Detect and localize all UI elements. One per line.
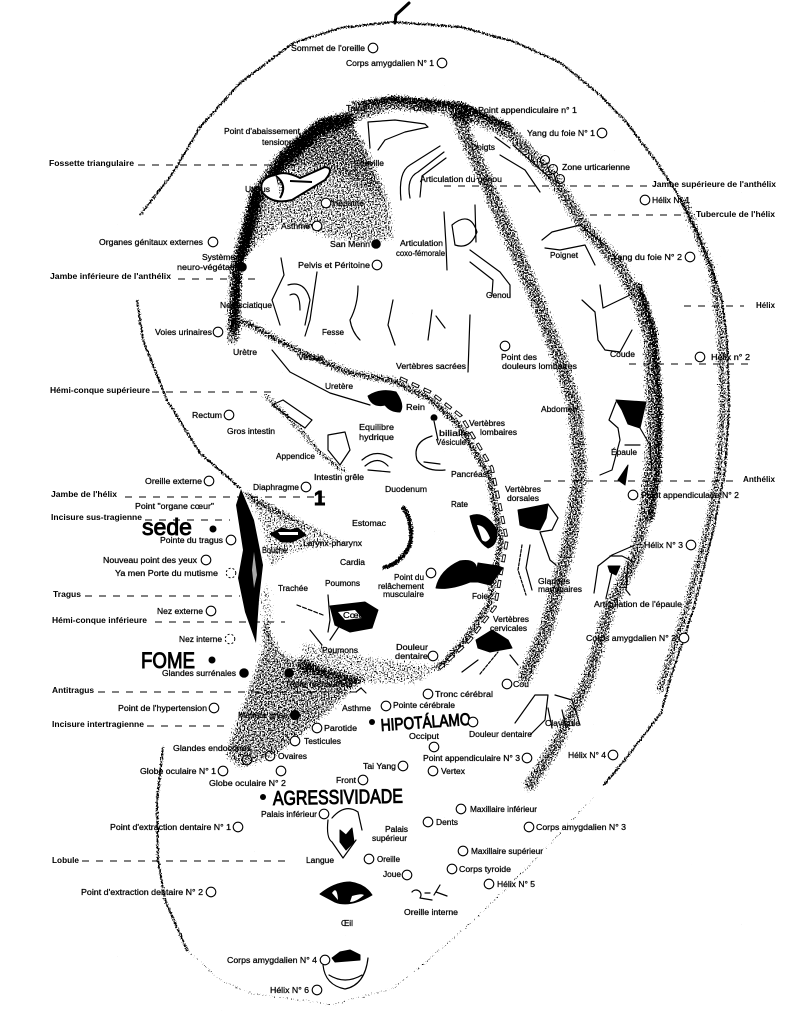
point: Oreille externe: Oreille externe [145,477,203,486]
point: Nez externe [157,606,216,616]
label: Gros intestin: Gros intestin [227,427,275,436]
label: biliaire Vésicule: biliaire [439,429,471,438]
label: Vertèbres dorsales [505,485,541,503]
point: douleurs lombaires: douleurs lombaires [502,362,577,371]
label: Genou: Genou [486,291,511,300]
label: Orteils: Orteils [413,104,437,113]
point: Cou [502,679,529,689]
label: biliaire Vésicule: Vésicule [436,438,467,447]
point: Zone urticarienne: Zone urticarienne [562,163,631,172]
label: Vertèbres cervicales: Vertèbres [493,615,529,624]
icon: wrist and hand [542,225,605,265]
label: Incisure intertragienne: Incisure intertragienne [52,720,145,729]
point: Diaphragme [253,482,311,492]
label: Tragus: Tragus [53,590,82,599]
point: Asthme and Pointe cérébrale [342,701,456,713]
point: Corps amygdalien 3: Corps amygdalien N° 3 [536,823,627,832]
label: Cardia: Cardia [340,558,366,567]
point: Glandes surrénales: Glandes surrénales [162,669,236,678]
point: Douleur dentaire lower [468,717,533,739]
label: Equilibre hydrique: hydrique [359,433,395,442]
point: Ovaires [242,751,307,765]
panel: ear drawing [137,22,729,1005]
point: Hélix 3: Hélix N° 3 [644,541,684,550]
point: Sommet de l'oreille: Sommet de l'oreille [291,44,366,53]
point: Yang du foie 1: Yang du foie N° 1 [527,129,596,138]
point: Globe oculaire 1: Globe oculaire N° 1 [140,767,217,776]
point: Voies urinaires: Voies urinaires [155,328,212,337]
point: Hélix 4 [568,750,618,760]
icon: woman head with shoulder [616,400,646,428]
point: Ya men [115,568,236,578]
point: Joue [383,870,412,880]
point: Yang du foie 2: Yang du foie N° 2 [612,253,683,262]
point: relâchement musculaire: musculaire [383,590,425,599]
point: Zone urticarienne [540,156,631,184]
point: Parotide [312,723,358,733]
label: Foie: Foie [472,592,489,601]
point: Palais inférieur: Palais inférieur [261,810,317,819]
vertebrae dashed strip [400,378,507,668]
label: Vertèbres lombaires [469,419,517,437]
point: Pelvis et Péritoine: Pelvis et Péritoine [298,261,371,270]
icon: foot [368,120,428,150]
label: Doigts: Doigts [471,143,495,152]
point: Front [336,775,368,785]
point: Point appendiculaire 2: Point appendiculaire N° 2 [641,491,740,500]
outer ear contour [137,22,729,1005]
label: Estomac: Estomac [352,519,386,528]
handwritten number 1: 1 [314,488,325,510]
icon: knee [400,146,446,200]
point: Hélix 4: Hélix N° 4 [568,751,607,760]
point: Corps amygdalien 1: Corps amygdalien N° 1 [346,59,435,68]
label: Vertèbres cervicales [490,615,529,633]
point: Hélix 5: Hélix N° 5 [497,880,536,889]
point: Occiput: Occiput [409,732,440,741]
point: Testicules: Testicules [304,737,341,746]
label: Poumons lower: Poumons [322,646,358,655]
point: Oreille [364,854,401,864]
label: Larynx-pharynx: Larynx-pharynx [303,539,362,548]
icon: spleen [470,515,497,548]
point: douleurs lombaires [500,341,577,371]
icon: shoulder joint [594,545,635,598]
point: Yang du foie 2 [612,252,695,262]
point: Occiput [409,732,440,752]
label: Talon: Talon [346,104,367,113]
label: Glandes mammaires [538,577,582,594]
label: Poumons upper: Poumons [325,579,360,588]
point: extraction dentaire 1: Point d'extraction dentaire N° 1 [110,823,232,832]
label: Articulation du genou: Articulation du genou [420,175,502,184]
point: Système neuro-végétatif [177,253,246,272]
point: Triple réchauffeur: Triple réchauffeur [285,680,353,689]
label: Palais supérieur [372,825,408,843]
label: Palais supérieur: supérieur [372,834,407,843]
point: abaissement tensionnel: tensionnel [262,138,300,147]
point: Ya men: Ya men Porte du mutisme [115,569,219,578]
point: Hélix 5 [484,879,536,889]
label: Vessie: Vessie [298,353,325,362]
point: Maxillaire inférieur: Maxillaire inférieur [470,805,537,814]
icon: buttock [350,286,395,345]
point: Hélix 1: Hélix N° 1 [652,196,691,205]
point: relâchement musculaire [378,568,436,599]
icon: lower mouth [332,950,360,962]
point: abaissement tensionnel [224,127,313,147]
point: Nez interne: Nez interne [179,635,223,644]
handwritten agressividade: AGRESSIVIDADE [273,786,403,810]
point: Hélix 3 [644,540,696,550]
icon: inner ear [412,885,447,900]
point: Joue: Joue [383,870,402,879]
label: biliaire Vésicule [436,429,471,447]
point: Matière grise [238,710,300,720]
point: Douleur dentaire upper: Douleur [396,643,428,652]
icon: neck cervical [476,630,512,652]
label: Articulation coxo-fémorale [396,239,446,258]
anatomical illustrations [261,120,652,989]
label: Anthélix: Anthélix [743,475,776,484]
point: Cou: Cou [513,680,529,689]
point: Point appendiculaire 1: Point appendiculaire n° 1 [478,106,578,115]
label: Glandes mammaires: Glandes [538,577,570,586]
point: Pointe du tragus: Pointe du tragus [160,536,223,545]
point: Douleur dentaire upper [395,643,438,661]
point: Douleur dentaire lower: Douleur dentaire [469,730,533,739]
icon: biliary vesicle and pancreas [416,421,445,470]
label: Vertèbres dorsales: dorsales [507,494,539,503]
point: Rectum [192,410,234,420]
tragus black shape [236,489,263,643]
label: Incisure sus-tragienne: Incisure sus-tragienne [51,513,143,522]
point: relâchement musculaire: relâchement [378,582,425,591]
point: Asthme: Asthme [281,222,311,231]
icon: adrenal small mark [356,688,366,693]
point: Organes génitaux externes: Organes génitaux externes [99,238,203,247]
point: Diaphragme: Diaphragme [253,483,300,492]
label: Urètre: Urètre [233,348,258,357]
point: Hélix 6: Hélix N° 6 [270,986,310,995]
region labels [49,159,777,865]
point: Hélix 2 [695,352,751,362]
point: San Menn: San Menn [330,240,370,249]
label: Intestin grêle: Intestin grêle [314,473,365,482]
handwritten hipotalamo [369,710,471,735]
point: Tronc cérébral [423,689,493,699]
label: Oeil: Œil [341,919,353,928]
point: Globe oculaire 2: Globe oculaire N° 2 [209,779,287,788]
point: Asthme and Pointe cérébrale: Asthme [342,704,372,713]
label: Fesse: Fesse [322,328,345,337]
point: Dents [423,817,458,827]
point: Triple réchauffeur [284,668,353,689]
label: Jambe inférieure: Jambe inférieure de l'anthélix [50,272,172,281]
label: Pancréas: Pancréas [451,470,487,479]
label: Épaule: Épaule [611,448,638,457]
handwritten sede [142,514,216,540]
icon: liver [436,561,503,588]
point: Hépatite [321,198,365,208]
point: Parotide: Parotide [324,724,358,733]
point: Rectum: Rectum [192,411,222,420]
point: Front: Front [336,776,357,785]
point: San Menn [330,240,380,249]
label: Equilibre hydrique: Equilibre [359,423,395,432]
handwritten sede: sede [142,514,192,540]
label: Tubercule de l'hélix: Tubercule de l'hélix [696,210,776,219]
label: Clavicule: Clavicule [545,719,581,728]
point: Vertex: Vertex [441,767,465,776]
icon: elbow [582,285,632,352]
label: Abdomen: Abdomen [541,405,577,414]
label: Bouche: Bouche [262,546,288,555]
label: Coeur: Cœur [343,611,367,620]
point: Dents: Dents [436,818,458,827]
label: Oreille interne: Oreille interne [404,908,459,917]
label: Coude: Coude [610,350,636,359]
point: extraction dentaire 2: Point d'extraction dentaire N° 2 [81,888,204,897]
label: Glandes endocrines: Glandes endocrines [173,744,251,753]
icon: mouth [270,528,306,542]
label: Hémi-conque inférieure: Hémi-conque inférieure [52,616,148,625]
point: Hélix 1 [640,195,691,205]
handwritten top stroke [395,3,409,23]
point: Hépatite: Hépatite [332,199,365,208]
icon: ureter [272,350,370,405]
label: Trachée: Trachée [278,584,309,593]
icon: clavicle [515,695,580,735]
point: Corps amygdalien 4: Corps amygdalien N° 4 [227,956,318,965]
point: Nez externe: Nez externe [157,607,204,616]
icon: spine [518,545,526,595]
icon: kidney [368,391,402,412]
icon: pelvis and sciatic nerve [272,258,317,336]
icon: sacral vertebrae [428,310,470,372]
label: Antitragus: Antitragus [52,686,95,695]
shaded bands of helix and antihelix [225,98,723,785]
point: Matière grise: Matière grise [238,711,289,720]
label: Vertèbres sacrées: Vertèbres sacrées [396,362,466,371]
icon: eye [320,882,372,904]
point: Tai Yang: Tai Yang [363,762,396,771]
label: Glandes mammaires: mammaires [538,585,582,594]
point: Point de l'hypertension: Point de l'hypertension [118,704,207,713]
icon: fingers [495,137,550,192]
point: Nez interne [179,634,235,644]
label: Vertèbres lombaires: lombaires [480,428,517,437]
point: Globe oculaire 2 [209,766,287,788]
label: Hémi-conque supérieure: Hémi-conque supérieure [50,386,151,395]
label: Nerf sciatique: Nerf sciatique [220,301,273,310]
point: douleurs lombaires: Point des [501,353,537,362]
label: Poignet: Poignet [550,251,579,260]
point: Douleur dentaire upper: dentaire [395,652,429,661]
acupuncture points and labels [81,43,751,995]
label: Jambe de l'hélix: Jambe de l'hélix [51,490,118,499]
point: Corps amygdalien 2: Corps amygdalien N° 2 [586,634,677,643]
handwritten annotations [141,3,471,810]
point: Maxillaire supérieur: Maxillaire supérieur [471,847,543,856]
label: Vertèbres lombaires: Vertèbres [469,419,505,428]
point: relâchement musculaire: Point du [394,573,424,582]
label: Lobule: Lobule [52,856,80,865]
icon: hip joint [444,205,510,297]
label: Rein: Rein [406,403,425,412]
icon: uterus [261,167,330,201]
icon: head with dorsal vertebrae [518,504,548,530]
label: Articulation coxo-fémorale: Articulation [400,239,443,248]
handwritten fome: FOME [141,648,195,673]
label: Articulation de l'épaule: Articulation de l'épaule [594,600,683,609]
icon: palate [328,809,362,858]
label: Vertèbres cervicales: cervicales [490,624,527,633]
point: Hélix 6 [270,985,322,995]
label: Rate: Rate [451,500,469,509]
point: Oreille externe [145,476,214,486]
label: Uretère: Uretère [325,382,354,391]
point: Vertex [428,766,465,776]
point: Oreille: Oreille [377,855,401,864]
label: Vertèbres dorsales: Vertèbres [505,485,541,494]
point: Nouveau point des yeux: Nouveau point des yeux [103,556,197,565]
label: Articulation coxo-fémorale: coxo-fémorale [396,249,446,258]
label: Jambe supérieure: Jambe supérieure de l'anthélix [652,180,777,189]
label: Fossette triangulaire: Fossette triangulaire [49,159,135,168]
label: Hélix: Hélix [756,301,776,310]
point: Système neuro-végétatif: neuro-végétatif [177,263,238,272]
point: Corps tyroïde [447,864,512,874]
label: Cheville: Cheville [354,159,385,168]
icon: intestines [272,400,312,428]
label: Point organe coeur: Point "organe cœur" [135,502,214,511]
point: Tai Yang [363,761,408,771]
point: Testicules [290,736,341,746]
point: Hélix 2: Hélix n° 2 [711,353,751,362]
label: Utérus: Utérus [245,185,270,194]
point: Système neuro-végétatif: Système [202,253,236,262]
handwritten hipotalamo: HIPOTÁLAMO [380,710,471,735]
label: Duodenum: Duodenum [385,485,427,494]
label: Equilibre hydrique [359,423,395,442]
point: Point appendiculaire 3: Point appendiculaire N° 3 [423,754,521,763]
point: Asthme and Pointe cérébrale: Pointe cérébrale [393,701,456,710]
label: Appendice: Appendice [276,452,316,461]
point: abaissement tensionnel: Point d'abaissement [224,127,301,136]
point: Tronc cérébral: Tronc cérébral [435,690,493,699]
reference dashed lines [82,165,750,861]
icon: lungs and heart [297,605,323,615]
point: Ovaires: Ovaires [278,752,307,761]
label: Langue: Langue [306,856,335,865]
point: Corps tyroïde: Corps tyroide [459,865,512,874]
point: Asthme [281,221,322,231]
icon: stomach [382,506,411,568]
label: Palais supérieur: Palais [385,825,408,834]
